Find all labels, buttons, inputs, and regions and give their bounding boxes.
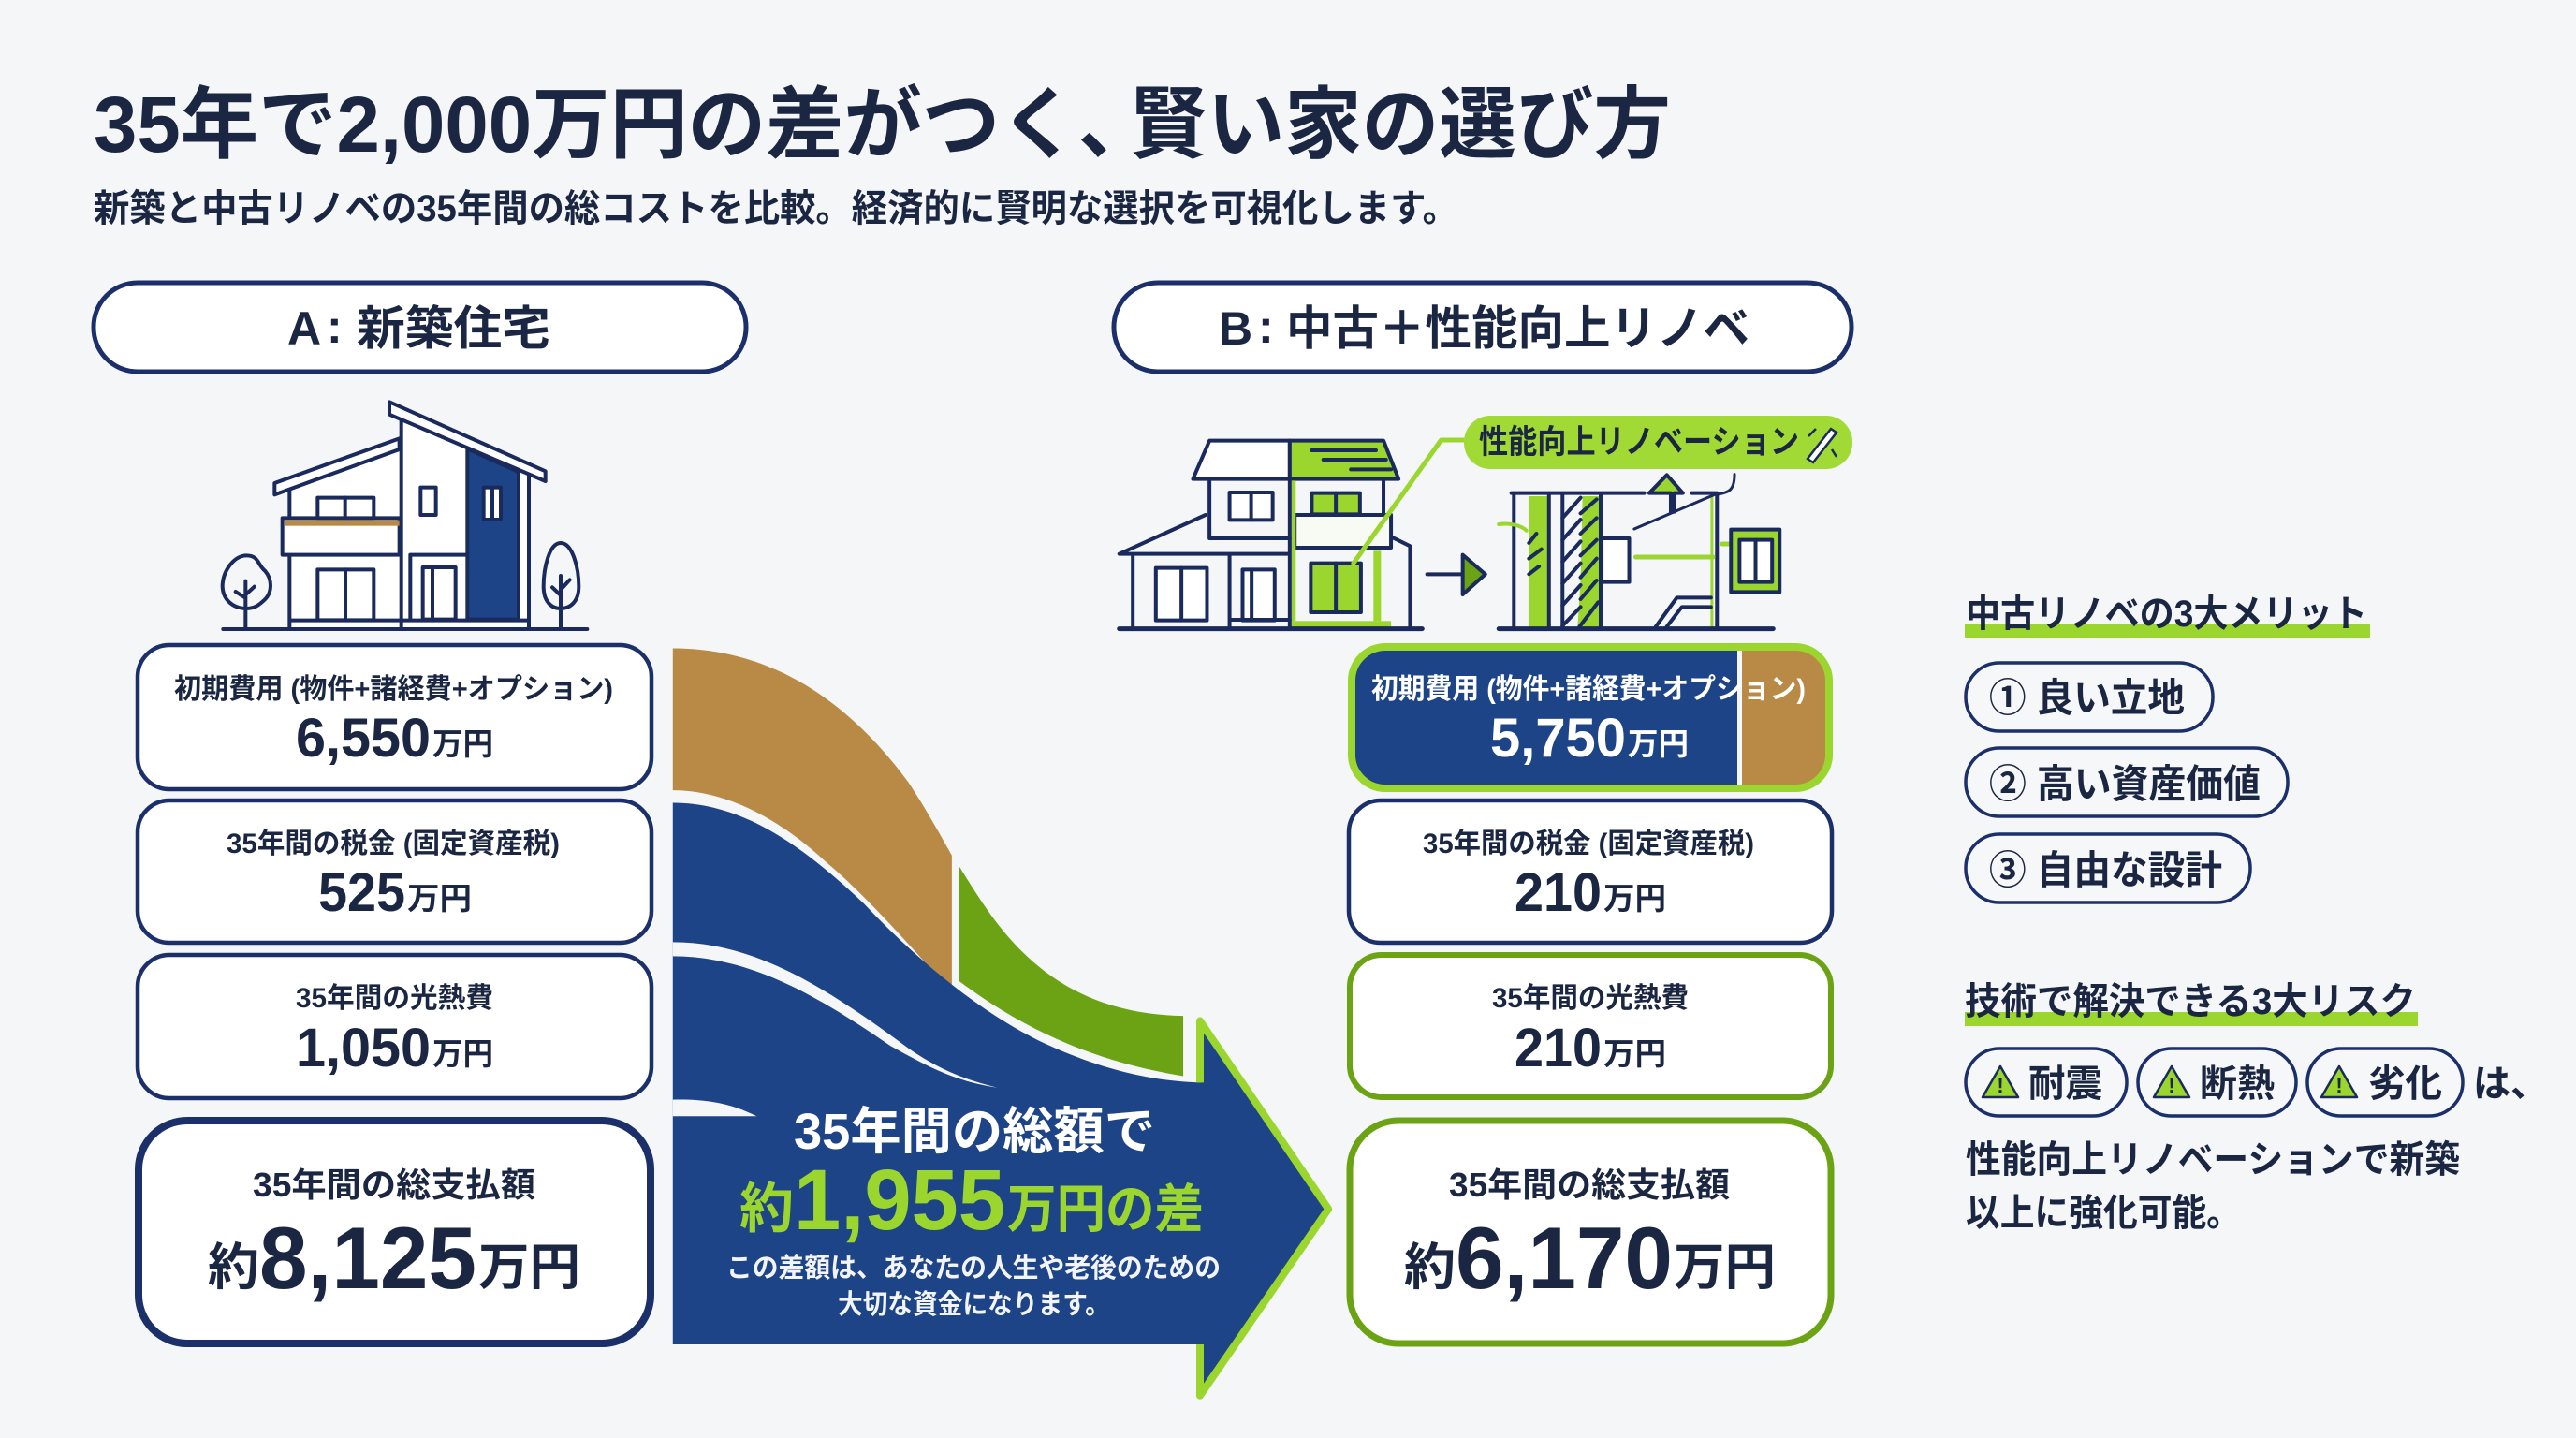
callout: performance renovation xyxy=(1464,416,1852,469)
card: B total xyxy=(1350,1121,1831,1343)
text: risk explanation: 性能向上リノベーションで新築 xyxy=(1966,1139,2460,1181)
card: A total xyxy=(139,1121,651,1343)
title: 賢い家の選び方 xyxy=(1130,81,1671,169)
text: difference amount: 約 xyxy=(739,1179,794,1240)
pill: merit 1: ① 良い立地 xyxy=(1989,676,2185,720)
text: difference headline: 35年間の総額で xyxy=(794,1104,1155,1160)
card: B initial cost: 初期費用 (物件+諸経費+オプション) xyxy=(1371,674,1806,705)
card: B total: 35年間の総支払額 xyxy=(1449,1166,1730,1204)
card: A total: 約 xyxy=(208,1240,259,1296)
text: difference note xyxy=(726,1253,1221,1320)
card: A energy: 1,050 xyxy=(296,1018,431,1078)
pill: merit 1 xyxy=(1966,663,2213,731)
panel: B costs xyxy=(1349,647,1832,1343)
heading pill: B renovation xyxy=(1114,283,1852,372)
card: B tax: 万円 xyxy=(1603,881,1666,916)
card: B total: 6,170 xyxy=(1456,1209,1673,1307)
card: A initial cost: 初期費用 (物件+諸経費+オプション) xyxy=(174,674,613,705)
heading pill: A new build: : xyxy=(327,301,343,353)
white gap lines xyxy=(673,942,997,1116)
panel: A costs xyxy=(138,645,651,1343)
pill: insulation: ! xyxy=(2168,1074,2175,1097)
text: difference amount: 万円の差 xyxy=(1007,1180,1204,1239)
text: difference amount: 1,955 xyxy=(794,1152,1005,1248)
icon: renovated house and wall section xyxy=(1120,440,1779,629)
card: A energy xyxy=(138,955,651,1098)
pill: merit 2: ② 高い資産価値 xyxy=(1989,762,2261,806)
pill: earthquake resistance: ! xyxy=(1997,1074,2004,1097)
card: B tax: 35年間の税金 (固定資産税) xyxy=(1423,829,1754,859)
card: B energy: 万円 xyxy=(1603,1036,1666,1071)
pill: deterioration xyxy=(2307,1049,2463,1116)
callout: performance renovation: 性能向上リノベーション xyxy=(1479,424,1799,461)
card: B energy: 210 xyxy=(1515,1018,1602,1078)
pill: earthquake resistance: 耐震 xyxy=(2028,1064,2102,1105)
heading: risks: 技術で解決できる3大リスク xyxy=(1965,981,2416,1022)
card: A tax: 万円 xyxy=(407,881,472,916)
card: A initial cost xyxy=(138,645,651,789)
heading pill: A new build: 新築住宅 xyxy=(357,302,550,355)
pill: deterioration: ! xyxy=(2335,1074,2343,1097)
pill: merit 3 xyxy=(1966,834,2250,902)
card: A initial cost: 万円 xyxy=(432,726,493,761)
card: A total: 35年間の総支払額 xyxy=(253,1166,535,1204)
pill: deterioration: 劣化 xyxy=(2368,1064,2442,1105)
text: difference note: 大切な資金になります。 xyxy=(838,1289,1110,1320)
heading pill: B renovation: 中古＋性能向上リノベ xyxy=(1286,302,1749,355)
heading: merits: 中古リノベの3大メリット xyxy=(1966,594,2367,635)
heading pill: B renovation: B xyxy=(1219,302,1252,355)
title xyxy=(94,81,1671,169)
text: difference note: この差額は、あなたの人生や老後のための xyxy=(726,1253,1221,1284)
icon: new house xyxy=(223,402,587,629)
heading pill: B renovation: : xyxy=(1258,301,1274,353)
card: B tax xyxy=(1349,800,1832,943)
sidebar: risks xyxy=(1965,981,2548,1234)
card: B initial cost: 万円 xyxy=(1628,726,1689,761)
text: risk suffix: は、 xyxy=(2473,1064,2548,1105)
card: B total: 万円 xyxy=(1674,1240,1776,1296)
card: A total: 万円 xyxy=(478,1240,580,1296)
card: A energy: 万円 xyxy=(432,1036,493,1071)
card: B initial cost: 5,750 xyxy=(1490,708,1626,769)
sidebar: merits xyxy=(1965,594,2370,902)
card: A tax: 525 xyxy=(318,862,405,923)
pill: earthquake resistance xyxy=(1966,1049,2127,1116)
text: risk explanation: 以上に強化可能。 xyxy=(1966,1193,2241,1234)
card: A total: 8,125 xyxy=(259,1209,476,1307)
arrow: blue total xyxy=(673,802,1328,1397)
pill: merit 3: ③ 自由な設計 xyxy=(1989,848,2222,892)
heading pill: A new build: A xyxy=(287,302,321,355)
heading pill: A new build xyxy=(94,283,746,372)
highlight underline: risks xyxy=(1965,1012,2418,1026)
ribbon: green saving xyxy=(959,865,1183,1076)
text: difference amount xyxy=(739,1152,1204,1248)
card: B tax: 210 xyxy=(1515,862,1602,923)
ribbon: tan initial cost xyxy=(673,648,952,993)
subtitle: 新築と中古リノベの35年間の総コストを比較。経済的に賢明な選択を可視化します。 xyxy=(94,188,1458,229)
flow ribbons and total difference arrow xyxy=(673,648,1328,1397)
pill: insulation: 断熱 xyxy=(2200,1064,2275,1105)
card: B energy xyxy=(1350,955,1831,1097)
card: A energy: 35年間の光熱費 xyxy=(296,983,493,1014)
card: B energy: 35年間の光熱費 xyxy=(1492,983,1689,1014)
pill: merit 2 xyxy=(1966,748,2288,816)
card: A tax: 35年間の税金 (固定資産税) xyxy=(227,829,560,859)
card: A tax xyxy=(138,800,651,943)
pill: insulation xyxy=(2138,1049,2296,1116)
arrowhead outline xyxy=(1200,1021,1328,1396)
card: B initial cost xyxy=(1352,647,1829,788)
highlight underline: merits xyxy=(1965,624,2370,638)
card: B total: 約 xyxy=(1404,1240,1456,1296)
title: 35年で2,000万円の差がつく、 xyxy=(94,81,1156,169)
card: A initial cost: 6,550 xyxy=(296,708,431,769)
text: risk explanation xyxy=(1966,1139,2460,1234)
